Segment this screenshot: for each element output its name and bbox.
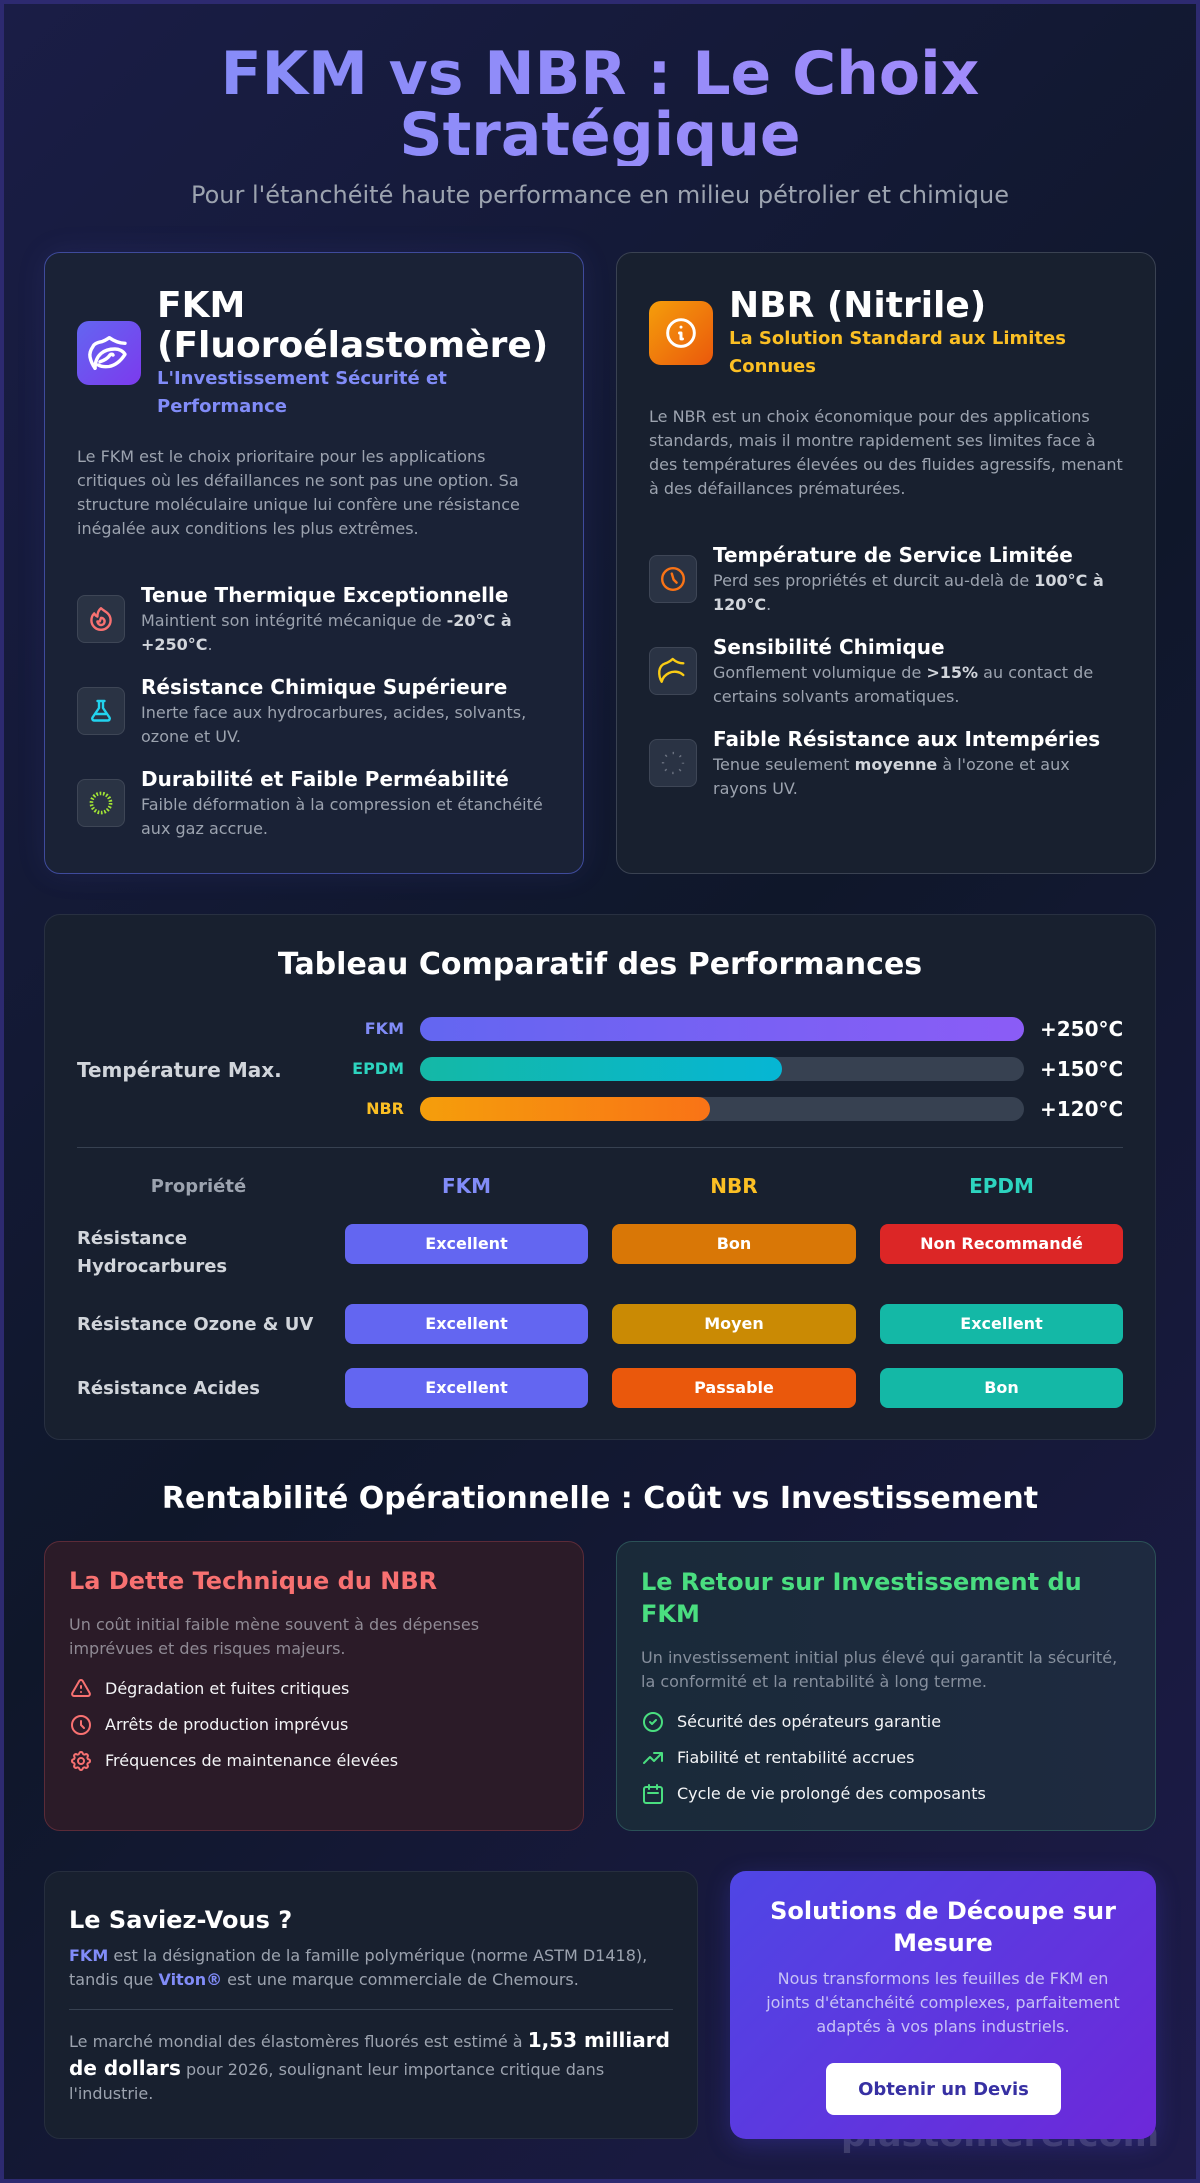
feature text: Perd ses propriétés et durcit au-delà de 100°C à [713, 571, 1104, 590]
panel: call to action [730, 1871, 1156, 2139]
feature text: Maintient son intégrité mécanique de -20°C à [141, 611, 512, 630]
row label: hydrocarbons: Résistance [77, 1228, 187, 1249]
title: Stratégique [399, 100, 801, 170]
subheading: FKM [157, 368, 447, 417]
cell [880, 1224, 1123, 1264]
heading: NBR: NBR (Nitrile) [729, 285, 986, 326]
feature text: 120°C. [713, 595, 771, 614]
bar NBR [420, 1097, 1024, 1121]
row label: ozone: Résistance Ozone & UV [77, 1314, 313, 1335]
icon: trend up [643, 1752, 663, 1764]
subheading: NBR [729, 328, 1066, 377]
text: market: Le marché mondial des élastomères fluorés est estimé à 1,53 milliard [69, 2028, 670, 2052]
icon: flask [77, 687, 125, 735]
cell: Excellent [960, 1314, 1043, 1333]
text: NBR description: Le NBR est un choix économique pour des applications [649, 407, 1090, 426]
feature text: Inerte face aux hydrocarbures, acides, solvants, [141, 703, 526, 722]
feature title: Durabilité et Faible Perméabilité [141, 767, 509, 791]
feature text: ozone et UV. [141, 727, 241, 746]
cell: Bon [717, 1234, 751, 1253]
cell [345, 1224, 588, 1264]
heading [770, 1897, 1116, 1957]
list item: Dégradation et fuites critiques [105, 1679, 349, 1698]
heading: La Dette Technique du NBR [69, 1567, 437, 1595]
icon: dotted ring [649, 739, 697, 787]
text: Nous transformons les feuilles de FKM en [778, 1969, 1108, 1988]
text: FKM description: Le FKM est le choix prioritaire pour les applications [77, 447, 486, 466]
text: market: l'industrie. [69, 2084, 153, 2103]
text: imprévues et des risques majeurs. [69, 1639, 346, 1658]
feature: temperature [649, 543, 1104, 614]
feature text: Faible déformation à la compression et étanchéité [141, 795, 543, 814]
title [44, 44, 1156, 166]
heading: FKM [157, 285, 548, 366]
bar FKM [420, 1017, 1024, 1041]
feature title: Sensibilité Chimique [713, 635, 945, 659]
feature text: certains solvants aromatiques. [713, 687, 959, 706]
cell [880, 1368, 1123, 1408]
feature text: Tenue seulement moyenne à l'ozone et aux [713, 755, 1070, 774]
panel: FKM [44, 252, 584, 874]
cell: Passable [694, 1378, 774, 1397]
icon: clock [649, 555, 697, 603]
cell [880, 1304, 1123, 1344]
feature text: rayons UV. [713, 779, 798, 798]
text: market [69, 2028, 670, 2103]
text: Un coût initial faible mène souvent à des dépenses [69, 1615, 479, 1634]
feature title: Tenue Thermique Exceptionnelle [141, 583, 508, 607]
feature text [712, 755, 1070, 798]
icon: check [643, 1712, 663, 1732]
subheading: NBR: Connues [729, 356, 816, 377]
heading: FKM: (Fluoroélastomère) [157, 325, 548, 366]
subtitle: Pour l'étanchéité haute performance en milieu pétrolier et chimique [191, 181, 1009, 209]
table header: property: Propriété [151, 1176, 246, 1197]
text: FKM description: critiques où les défaillances ne sont pas une option. Sa [77, 471, 519, 490]
cell: Moyen [704, 1314, 764, 1333]
list item: Fréquences de maintenance élevées [105, 1751, 398, 1770]
feature: chemical [77, 675, 526, 746]
heading: FKM [641, 1600, 700, 1628]
table header: NBR: NBR [710, 1174, 758, 1198]
feature: weathering [649, 727, 1100, 798]
cell [345, 1368, 588, 1408]
icon: FKM shield [77, 321, 141, 385]
section heading: profitability: Rentabilité Opérationnelle : Coût vs Investissement [162, 1481, 1038, 1516]
panel: comparison table [44, 914, 1156, 1440]
feature title: Faible Résistance aux Intempéries [713, 727, 1100, 751]
heading: Le Retour sur Investissement du [641, 1568, 1082, 1596]
icon: warning [71, 1679, 91, 1697]
row label: acids: Résistance Acides [77, 1378, 260, 1399]
list item: Arrêts de production imprévus [105, 1715, 348, 1734]
text: NBR description: standards, mais il montre rapidement ses limites face à [649, 431, 1096, 450]
button [826, 2063, 1061, 2115]
cell [612, 1368, 856, 1408]
cell [345, 1304, 588, 1344]
cell: Excellent [425, 1234, 508, 1253]
cell: Excellent [425, 1378, 508, 1397]
cell: Excellent [425, 1314, 508, 1333]
list item: Sécurité des opérateurs garantie [677, 1712, 941, 1731]
text [766, 1969, 1120, 2036]
text: NBR description [649, 407, 1123, 498]
cell: Non Recommandé [920, 1234, 1083, 1253]
bar label EPDM: EPDM [352, 1059, 404, 1078]
text [69, 1615, 479, 1658]
text: joints d'étanchéité complexes, parfaitement [766, 1993, 1120, 2012]
row label: hydrocarbons: Hydrocarbures [77, 1256, 227, 1277]
feature: thermal [77, 583, 512, 654]
value EPDM: +150°C [1040, 1057, 1123, 1081]
list item: Fiabilité et rentabilité accrues [677, 1748, 914, 1767]
text: la conformité et la rentabilité à long terme. [641, 1672, 987, 1691]
feature title: Température de Service Limitée [713, 543, 1073, 567]
table header: FKM: FKM [442, 1174, 491, 1198]
feature text [713, 663, 1093, 706]
text: market: de dollars pour 2026, soulignant leur importance critique dans [69, 2056, 604, 2080]
title: FKM vs NBR : Le Choix [221, 39, 979, 109]
icon: calendar [643, 1784, 663, 1804]
feature: chemical sensitivity [649, 635, 1093, 706]
subheading: FKM: Performance [157, 396, 287, 417]
list item: Cycle de vie prolongé des composants [677, 1784, 986, 1803]
heading: FKM: FKM [157, 285, 245, 326]
icon: flame [77, 595, 125, 643]
icon: NBR info [649, 301, 713, 365]
feature text [141, 703, 526, 746]
feature title: Résistance Chimique Supérieure [141, 675, 507, 699]
text [641, 1648, 1117, 1691]
watermark: plastomère.com [841, 2115, 1159, 2155]
text: FKM description: inégalée aux conditions les plus extrêmes. [77, 519, 419, 538]
text: adaptés à vos plans industriels. [816, 2017, 1070, 2036]
row label: hydrocarbons [77, 1228, 227, 1277]
cell [612, 1224, 856, 1264]
subheading: NBR: La Solution Standard aux Limites [729, 328, 1066, 349]
label: temperature: Température Max. [77, 1058, 282, 1082]
panel: FKM return on investment [616, 1541, 1156, 1831]
text: FKM vs Viton: tandis que Viton® est une marque commerciale de Chemours. [69, 1970, 579, 1989]
feature text: aux gaz accrue. [141, 819, 268, 838]
text: NBR description: à des défaillances prématurées. [649, 479, 905, 498]
cell: Bon [984, 1378, 1019, 1397]
heading: Mesure [893, 1929, 993, 1957]
feature text: Gonflement volumique de >15% au contact de [713, 663, 1093, 682]
text: FKM vs Viton: FKM est la désignation de la famille polymérique (norme ASTM D1418), [69, 1946, 647, 1965]
text: NBR description: des températures élevées ou des fluides agressifs, menant [649, 455, 1123, 474]
text: FKM vs Viton [69, 1946, 647, 1989]
subheading: FKM: L'Investissement Sécurité et [157, 368, 447, 389]
feature text [141, 795, 543, 838]
feature text [713, 571, 1104, 614]
feature text [141, 611, 512, 654]
panel: NBR [616, 252, 1156, 874]
feature: durability [77, 767, 543, 838]
text: FKM description: structure moléculaire unique lui confère une résistance [77, 495, 520, 514]
heading [641, 1568, 1082, 1628]
icon: dashed ring [77, 779, 125, 827]
heading: Le Saviez-Vous ? [69, 1906, 292, 1934]
icon: clock [71, 1715, 91, 1735]
button: Obtenir un Devis [858, 2079, 1029, 2100]
icon: gear [71, 1751, 91, 1771]
panel: NBR technical debt [44, 1541, 584, 1831]
panel: did you know [44, 1871, 698, 2139]
chart: max temperature [77, 1017, 1123, 1121]
icon: swollen shape [649, 647, 697, 695]
text: Un investissement initial plus élevé qui garantit la sécurité, [641, 1648, 1117, 1667]
table header: EPDM: EPDM [969, 1174, 1034, 1198]
bar EPDM [420, 1057, 1024, 1081]
value NBR: +120°C [1040, 1097, 1123, 1121]
heading: table: Tableau Comparatif des Performances [278, 947, 922, 982]
value FKM: +250°C [1040, 1017, 1123, 1041]
bar label FKM: FKM [365, 1019, 404, 1038]
text: FKM description [77, 447, 520, 538]
feature text: +250°C. [141, 635, 213, 654]
cell [612, 1304, 856, 1344]
heading: Solutions de Découpe sur [770, 1897, 1116, 1925]
bar label NBR: NBR [366, 1099, 404, 1118]
